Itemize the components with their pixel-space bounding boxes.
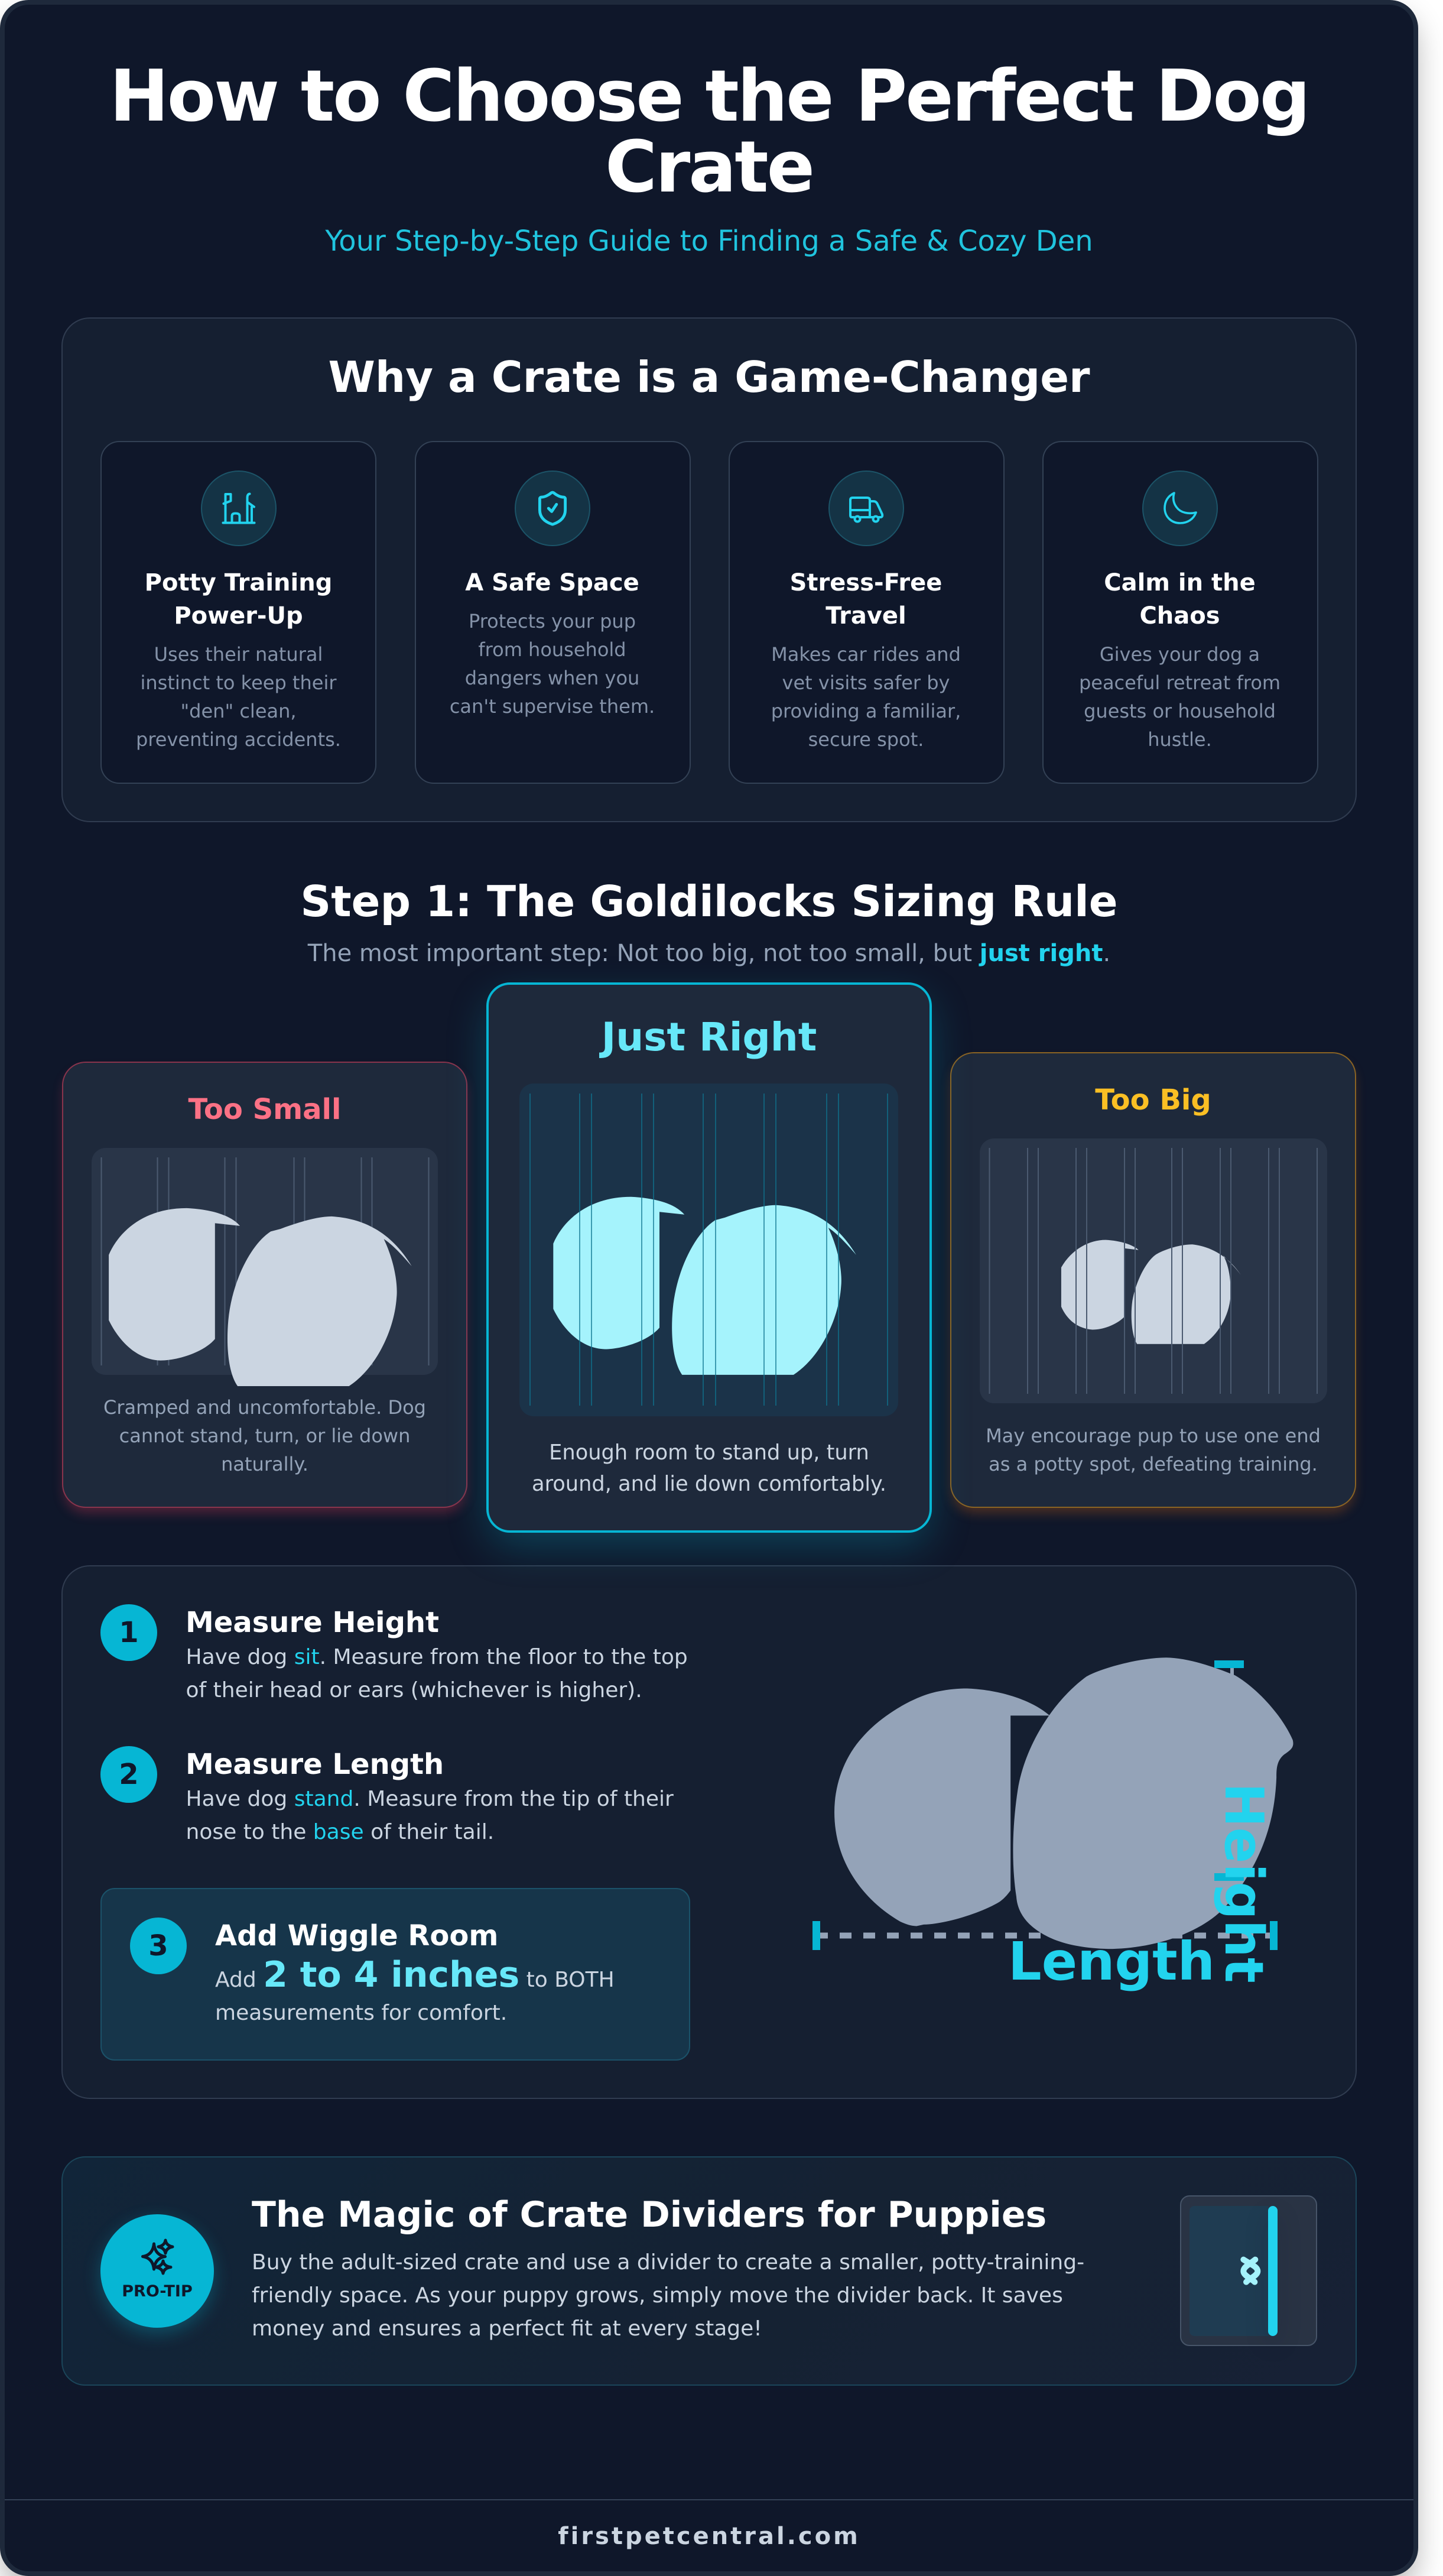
text: safe space body: dangers when you bbox=[465, 667, 639, 689]
text: potty training body bbox=[136, 643, 341, 751]
title bbox=[109, 56, 1309, 209]
text: calm title: Calm in the bbox=[1104, 569, 1256, 596]
panel: pro tip bbox=[61, 2156, 1357, 2386]
step badge 1: 1 bbox=[119, 1616, 139, 1649]
card: too small bbox=[62, 1062, 467, 1508]
text: calm body: Gives your dog a bbox=[1100, 643, 1260, 666]
text: crate dividers body: Buy the adult-sized crate and use a divider to create a smaller, potty-training- bbox=[252, 2250, 1084, 2275]
icon: shield bbox=[515, 471, 590, 546]
text: crate dividers body: friendly space. As your puppy grows, simply move the divider back. It saves bbox=[252, 2283, 1063, 2308]
badge: pro-tip bbox=[100, 2214, 214, 2328]
step badge 3: 3 bbox=[148, 1929, 168, 1962]
card: a safe space bbox=[415, 441, 691, 784]
heading: why a crate: Why a Crate is a Game-Changer bbox=[328, 352, 1090, 402]
text: travel body: vet visits safer by bbox=[782, 671, 950, 694]
text: travel title: Travel bbox=[826, 602, 906, 630]
label: too big: Too Big bbox=[1095, 1083, 1211, 1117]
text: potty training title: Potty Training bbox=[145, 569, 332, 596]
text: too small description: cannot stand, turn, or lie down bbox=[119, 1425, 410, 1447]
icon: moon bbox=[1142, 471, 1218, 546]
text: potty training title bbox=[145, 569, 332, 630]
text: safe space title: A Safe Space bbox=[465, 569, 639, 596]
text: crate dividers body bbox=[252, 2250, 1084, 2341]
text: travel body: Makes car rides and bbox=[771, 643, 961, 666]
text: too big description: May encourage pup to use one end bbox=[986, 1425, 1321, 1447]
title: How to Choose the Perfect Dog bbox=[109, 56, 1309, 138]
text: wiggle room title: Add Wiggle Room bbox=[215, 1919, 498, 1952]
text: crate dividers body: money and ensures a perfect fit at every stage! bbox=[252, 2317, 762, 2341]
text: safe space body: can't supervise them. bbox=[450, 695, 655, 718]
step badge 2: 2 bbox=[119, 1758, 139, 1791]
callout: add wiggle room bbox=[100, 1888, 690, 2061]
text: calm body: peaceful retreat from bbox=[1079, 671, 1280, 694]
text: travel title bbox=[790, 569, 942, 630]
title: Crate bbox=[605, 126, 813, 209]
text: just right description bbox=[532, 1441, 886, 1496]
crate: too small bbox=[92, 1148, 438, 1375]
text: calm title: Chaos bbox=[1139, 602, 1220, 630]
text: calm body: guests or household bbox=[1084, 700, 1276, 722]
diagram: dog with height and length measurements: Length bbox=[1008, 1931, 1215, 1992]
text: too big description: as a potty spot, defeating training. bbox=[989, 1453, 1318, 1475]
text: safe space body: Protects your pup bbox=[469, 610, 636, 632]
text: safe space body: from household bbox=[478, 638, 626, 661]
card: calm in the chaos bbox=[1042, 441, 1318, 784]
text: calm body bbox=[1079, 643, 1280, 751]
card: stress-free travel bbox=[729, 441, 1005, 784]
text: travel title: Stress-Free bbox=[790, 569, 942, 596]
text: travel body: secure spot. bbox=[808, 728, 924, 751]
text: step 1 subtitle: The most important step: Not too big, not too small, but just right. bbox=[308, 940, 1110, 967]
text: potty training body: preventing accidents. bbox=[136, 728, 341, 751]
panel: why a crate is a game-changer bbox=[61, 317, 1357, 822]
text: calm title bbox=[1104, 569, 1256, 630]
card: just right bbox=[486, 982, 932, 1533]
text: just right description: around, and lie down comfortably. bbox=[532, 1472, 886, 1496]
text: travel body: providing a familiar, bbox=[771, 700, 961, 722]
card: potty training bbox=[100, 441, 376, 784]
label: just right: Just Right bbox=[602, 1014, 817, 1060]
footer divider and site name: firstpetcentral.com bbox=[558, 2523, 860, 2550]
step badge 1 bbox=[100, 1604, 157, 1661]
crate: too big bbox=[980, 1138, 1327, 1403]
text: measure length title: Measure Length bbox=[186, 1748, 444, 1781]
illustration: small dog in oversized crate bbox=[989, 1148, 1318, 1394]
icon: truck bbox=[828, 471, 904, 546]
text: too big description bbox=[986, 1425, 1321, 1475]
subtitle: Your Step-by-Step Guide to Finding a Safe & Cozy Den bbox=[325, 225, 1093, 258]
text: wiggle room body bbox=[215, 1954, 615, 2025]
label: too small: Too Small bbox=[188, 1093, 341, 1126]
diagram: dog with height and length measurements bbox=[812, 1657, 1293, 1992]
crate: just right bbox=[519, 1083, 898, 1416]
illustration: cramped dog in crate bbox=[100, 1157, 429, 1386]
text: calm body: hustle. bbox=[1148, 728, 1212, 751]
text: safe space body bbox=[450, 610, 655, 718]
text: just right description: Enough room to stand up, turn bbox=[549, 1441, 869, 1465]
panel: measuring guide bbox=[61, 1565, 1357, 2099]
badge: pro-tip: PRO-TIP bbox=[122, 2282, 193, 2301]
text: measure height title: Measure Height bbox=[186, 1606, 439, 1639]
text: too small description bbox=[103, 1396, 426, 1475]
text: wiggle room body: Add 2 to 4 inches to BOTH bbox=[215, 1954, 615, 1996]
illustration: well-fitted dog in crate bbox=[529, 1094, 888, 1406]
icon: potty training bbox=[201, 471, 277, 546]
text: too small description: Cramped and uncomfortable. Dog bbox=[103, 1396, 426, 1419]
text: measure height body bbox=[186, 1645, 688, 1702]
text: potty training body: Uses their natural bbox=[154, 643, 323, 666]
heading: step 1: Step 1: The Goldilocks Sizing Rule bbox=[300, 877, 1118, 926]
text: travel body bbox=[771, 643, 961, 751]
footer divider and site name bbox=[5, 2499, 1413, 2571]
text: potty training body: instinct to keep their bbox=[141, 671, 336, 694]
text: measure length body: nose to the base of their tail. bbox=[186, 1820, 494, 1844]
text: potty training body: "den" clean, bbox=[180, 700, 297, 722]
step badge 3 bbox=[130, 1918, 187, 1974]
text: potty training title: Power-Up bbox=[174, 602, 303, 630]
text: wiggle room body: measurements for comfort. bbox=[215, 2000, 507, 2025]
text: too small description: naturally. bbox=[221, 1453, 308, 1475]
card: too big bbox=[950, 1052, 1356, 1508]
illustration: crate with divider bbox=[1180, 2195, 1317, 2346]
text: measure length body: Have dog stand. Measure from the tip of their bbox=[186, 1787, 674, 1811]
heading: crate dividers: The Magic of Crate Dividers for Puppies bbox=[252, 2194, 1046, 2236]
text: measure height body: of their head or ears (whichever is higher). bbox=[186, 1678, 642, 1702]
diagram: dog with height and length measurements: Height bbox=[1213, 1783, 1275, 1983]
text: measure length body bbox=[186, 1787, 674, 1844]
step badge 2 bbox=[100, 1746, 157, 1803]
text: measure height body: Have dog sit. Measure from the floor to the top bbox=[186, 1645, 688, 1669]
